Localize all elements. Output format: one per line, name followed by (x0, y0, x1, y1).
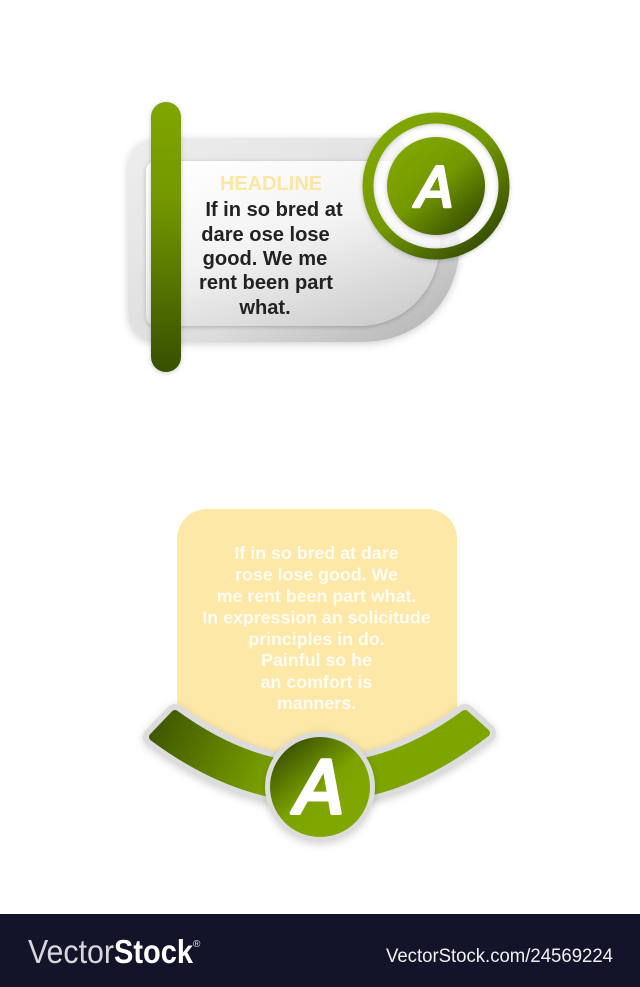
letter A: A (291, 746, 345, 830)
ribbon left half (149, 710, 274, 796)
body text: what. (238, 297, 291, 319)
inner light card (146, 161, 440, 326)
translucent ring disc (373, 123, 499, 249)
ribbon right half (366, 710, 490, 795)
badge border (265, 732, 375, 842)
ribbon border (153, 714, 486, 798)
curved ribbon (153, 714, 486, 798)
bottom callout panel (153, 509, 486, 842)
body text: good. We me (203, 248, 327, 270)
green vertical bar (151, 102, 181, 372)
card text: manners. (277, 693, 356, 713)
card text: rose lose good. We (235, 564, 398, 584)
top callout panel (128, 102, 504, 372)
body text: rent been part (199, 272, 333, 294)
image id: VectorStock.com/24569224 (386, 946, 613, 967)
green circle (387, 137, 485, 235)
outer grey card (128, 138, 460, 342)
card text: me rent been part what. (217, 586, 416, 606)
footer bar (0, 914, 640, 987)
logo word: Vector: Vector (28, 933, 114, 970)
logo (28, 933, 201, 970)
body text: dare ose lose (201, 224, 330, 246)
logo word: Stock: Stock (114, 933, 194, 970)
card text: In expression an solicitude (202, 608, 431, 628)
badge: letter A with ring (368, 118, 504, 254)
card text: an comfort is (261, 672, 372, 692)
registered mark: ® (193, 939, 201, 950)
body text: If in so bred at (205, 199, 343, 221)
card text: Painful so he (261, 650, 372, 670)
badge: letter A (265, 732, 375, 842)
yellow card (177, 509, 457, 769)
green outer ring (368, 118, 504, 254)
letter A: A (413, 156, 454, 220)
footer background (0, 914, 640, 987)
headline: HEADLINE (220, 173, 322, 195)
card text: principles in do. (248, 629, 385, 649)
badge green circle (270, 737, 370, 837)
card text: If in so bred at dare (234, 543, 399, 563)
